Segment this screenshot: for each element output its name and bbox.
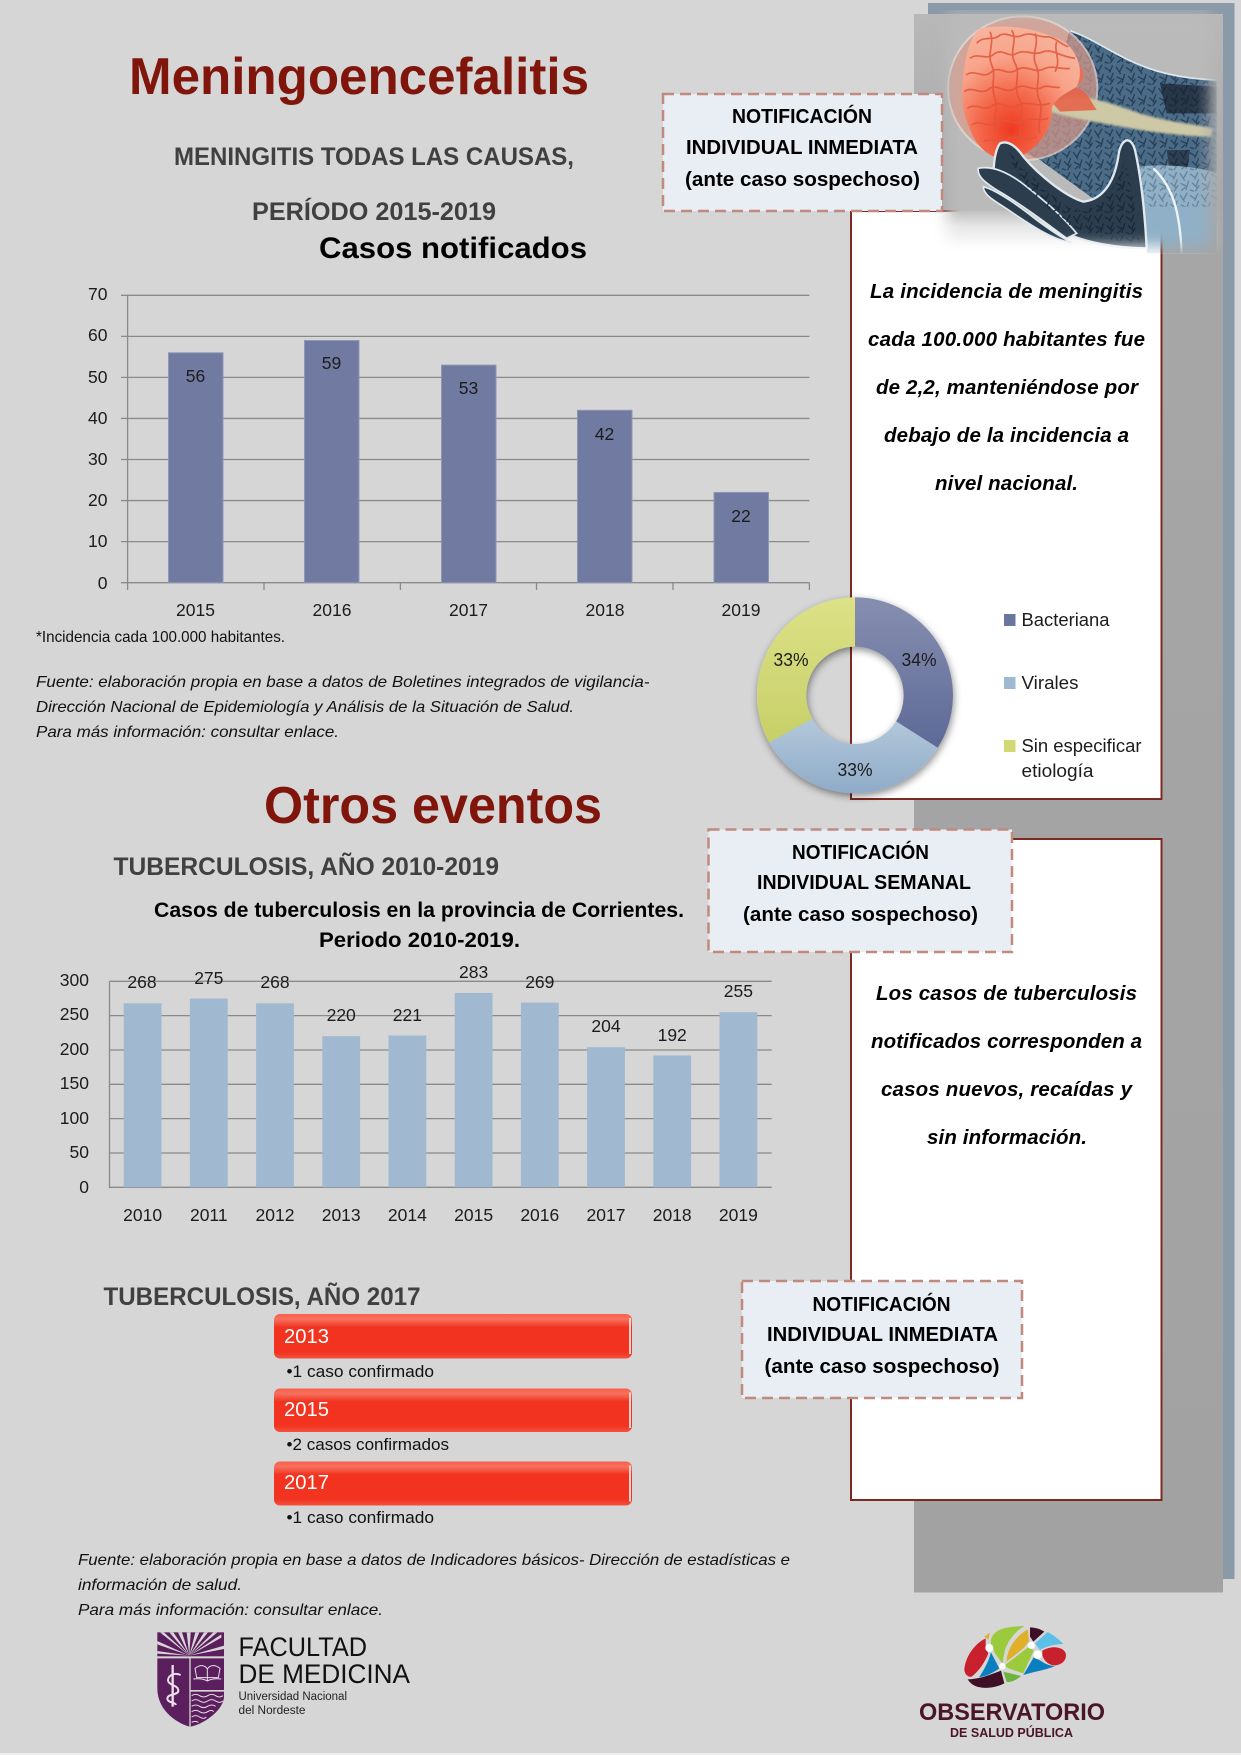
bar chart: tuberculosis cases 2010-2019: 2016 [520,1205,559,1225]
bar chart: meningitis cases 2015-2019: 0 [98,573,108,593]
bar chart: tuberculosis cases 2010-2019: 268 [127,972,157,992]
bar chart: meningitis cases 2015-2019: 22 [731,506,751,526]
callout: individual immediate notification, tuberculosis: INDIVIDUAL INMEDIATA [767,1323,998,1346]
logo: Facultad de Medicina: Universidad Nacional [238,1691,347,1703]
callout: individual immediate notification, tuberculosis: NOTIFICACIÓN [812,1292,950,1316]
bar chart: meningitis cases 2015-2019: 40 [88,408,108,428]
text: meningitis incidence: nivel nacional. [935,472,1078,495]
callout: individual immediate notification, meningitis: INDIVIDUAL INMEDIATA [686,136,918,159]
bar chart: meningitis cases 2015-2019: 53 [459,378,478,398]
bar chart: meningitis cases 2015-2019: 70 [88,284,108,304]
legend: etiology [1004,610,1142,781]
callout: individual weekly notification: INDIVIDUAL SEMANAL [757,871,971,894]
bar chart: tuberculosis cases 2010-2019: 50 [70,1142,89,1162]
year bar: 2017 [274,1462,632,1506]
text: meningitis incidence [868,280,1145,495]
chart title: tuberculosis cases: Casos de tuberculosis en la provincia de Corrientes. [154,899,684,922]
heading: tuberculosis 2017: TUBERCULOSIS, AÑO 2017 [104,1281,420,1311]
legend: etiology: Bacteriana [1022,610,1111,630]
bar chart: tuberculosis cases 2010-2019: 0 [79,1177,89,1197]
bar chart: tuberculosis cases 2010-2019: 100 [60,1108,89,1128]
bar chart: tuberculosis cases 2010-2019: 200 [60,1039,89,1059]
item: 1 case: •1 caso confirmado [286,1508,434,1527]
year bar: 2013 [274,1314,632,1358]
donut chart: etiology [757,597,953,793]
bar chart: tuberculosis cases 2010-2019: 2012 [256,1205,294,1225]
bar chart: meningitis cases 2015-2019: 60 [88,325,108,345]
chart title: casos notificados: Casos notificados [319,232,587,265]
bar chart: meningitis cases 2015-2019 [88,284,809,620]
bar chart: meningitis cases 2015-2019: 2018 [586,600,624,620]
bar chart: tuberculosis cases 2010-2019 [60,962,772,1225]
bar chart: tuberculosis cases 2010-2019: 204 [591,1016,621,1036]
text: tuberculosis note: Los casos de tuberculosis [876,982,1137,1005]
item: 1 case: •1 caso confirmado [286,1362,434,1381]
title: Otros eventos: Otros eventos [264,777,602,835]
text: tuberculosis note: notificados corresponden a [871,1030,1142,1053]
list: confirmed cases by year [274,1314,632,1527]
bar chart: tuberculosis cases 2010-2019: 2015 [454,1205,493,1225]
source note: meningitis: Para más información: consultar enlace. [36,724,339,741]
bar chart: tuberculosis cases 2010-2019: 2014 [388,1205,427,1225]
frame: blue-grey back panel [928,3,1234,1579]
logo: Facultad de Medicina [157,1632,410,1727]
bar chart: meningitis cases 2015-2019: 30 [88,449,108,469]
heading: meningitis all causes [174,143,574,226]
text: meningitis incidence: La incidencia de meningitis [870,280,1143,303]
panel: tuberculosis note box [851,839,1162,1500]
footnote: incidence: *Incidencia cada 100.000 habitantes. [36,629,285,646]
text: meningitis incidence: debajo de la incidencia a [884,424,1129,447]
callout: individual immediate notification, meningitis: (ante caso sospechoso) [685,168,920,191]
bar chart: meningitis cases 2015-2019: 50 [88,367,108,387]
bar chart: tuberculosis cases 2010-2019: 221 [393,1005,422,1025]
logo: Observatorio de Salud Pública: OBSERVATORIO [919,1699,1105,1726]
bar chart: tuberculosis cases 2010-2019: 300 [60,970,89,990]
source note: tuberculosis: Fuente: elaboración propia en base a datos de Indicadores básicos- Dirección de estadísticas e [78,1552,790,1569]
heading: meningitis all causes: MENINGITIS TODAS LAS CAUSAS, [174,143,574,171]
bar chart: tuberculosis cases 2010-2019: 150 [60,1073,89,1093]
item: 2 cases: •2 casos confirmados [286,1435,449,1454]
bar chart: meningitis cases 2015-2019: 2015 [176,600,215,620]
source note: meningitis [36,674,650,741]
logo: Facultad de Medicina: del Nordeste [238,1705,306,1717]
source note: meningitis: Dirección Nacional de Epidemiología y Análisis de la Situación de Salud. [36,699,574,716]
logo: Observatorio de Salud Pública: DE SALUD PÚBLICA [950,1725,1074,1740]
legend: etiology: Sin especificar [1022,736,1142,756]
icon: coloured brain [964,1626,1066,1688]
text: meningitis incidence: de 2,2, manteniéndose por [876,376,1139,399]
source note: tuberculosis: Para más información: consultar enlace. [78,1602,383,1619]
logo: Facultad de Medicina: DE MEDICINA [238,1659,410,1689]
bar chart: meningitis cases 2015-2019: 2016 [313,600,351,620]
text: tuberculosis note: casos nuevos, recaídas y [881,1078,1134,1101]
year bar: 2015: 2015 [284,1399,329,1421]
year bar: 2017: 2017 [284,1472,329,1494]
heading: tuberculosis 2010-2019: TUBERCULOSIS, AÑO 2010-2019 [114,851,499,881]
bar chart: tuberculosis cases 2010-2019: 283 [459,962,488,982]
text: tuberculosis note [871,982,1142,1149]
callout: individual weekly notification [708,830,1012,952]
panel: meningitis incidence box [851,211,1162,799]
bar chart: meningitis cases 2015-2019: 20 [88,490,108,510]
callout: individual weekly notification: NOTIFICACIÓN [792,840,929,864]
bar chart: tuberculosis cases 2010-2019: 2013 [322,1205,361,1225]
source note: tuberculosis: información de salud. [78,1577,242,1594]
donut chart: etiology: 34% [902,650,936,670]
chart title: tuberculosis cases [154,899,684,952]
bar chart: tuberculosis cases 2010-2019: 250 [60,1004,89,1024]
bar chart: tuberculosis cases 2010-2019: 275 [194,968,223,988]
bar chart: meningitis cases 2015-2019: 42 [595,424,614,444]
logo: Observatorio de Salud Pública [919,1626,1105,1740]
source note: tuberculosis [78,1552,790,1619]
bar chart: meningitis cases 2015-2019: 10 [88,531,108,551]
bar chart: tuberculosis cases 2010-2019: 220 [327,1005,356,1025]
image: brain and head illustration [923,10,1230,254]
bar chart: meningitis cases 2015-2019: 59 [322,353,341,373]
year bar: 2015 [274,1388,632,1432]
callout: individual weekly notification: (ante caso sospechoso) [743,903,978,926]
text: meningitis incidence: cada 100.000 habitantes fue [868,328,1145,351]
panel: grey sidebar [914,14,1223,1592]
bar chart: meningitis cases 2015-2019: 2017 [449,600,488,620]
bar chart: tuberculosis cases 2010-2019: 268 [260,972,290,992]
bar chart: tuberculosis cases 2010-2019: 2010 [123,1205,162,1225]
bar chart: tuberculosis cases 2010-2019: 2018 [653,1205,692,1225]
title: Meningoencefalitis: Meningoencefalitis [129,48,589,106]
bar chart: tuberculosis cases 2010-2019: 269 [525,972,554,992]
bar chart: tuberculosis cases 2010-2019: 2019 [719,1205,758,1225]
year bar: 2013: 2013 [284,1326,329,1348]
callout: individual immediate notification, tuberculosis [742,1281,1022,1398]
legend: etiology: Virales [1022,673,1078,693]
bar chart: tuberculosis cases 2010-2019: 2011 [190,1205,228,1225]
bar chart: meningitis cases 2015-2019: 2019 [722,600,760,620]
callout: individual immediate notification, meningitis [663,94,942,211]
text: tuberculosis note: sin información. [927,1126,1087,1149]
donut chart: etiology: 33% [838,760,872,780]
bar chart: tuberculosis cases 2010-2019: 255 [724,981,753,1001]
bar chart: tuberculosis cases 2010-2019: 2017 [587,1205,625,1225]
bar chart: meningitis cases 2015-2019: 56 [186,366,205,386]
chart title: tuberculosis cases: Periodo 2010-2019. [319,929,520,952]
source note: meningitis: Fuente: elaboración propia en base a datos de Boletines integrados de vigilancia- [36,674,650,691]
donut chart: etiology: 33% [774,650,808,670]
logo: Facultad de Medicina: FACULTAD [238,1632,367,1662]
callout: individual immediate notification, meningitis: NOTIFICACIÓN [732,104,872,128]
icon: faculty shield [157,1632,224,1727]
callout: individual immediate notification, tuberculosis: (ante caso sospechoso) [764,1355,1000,1378]
legend: etiology: etiología [1022,761,1095,781]
bar chart: tuberculosis cases 2010-2019: 192 [658,1025,687,1045]
heading: meningitis all causes: PERÍODO 2015-2019 [252,197,496,226]
